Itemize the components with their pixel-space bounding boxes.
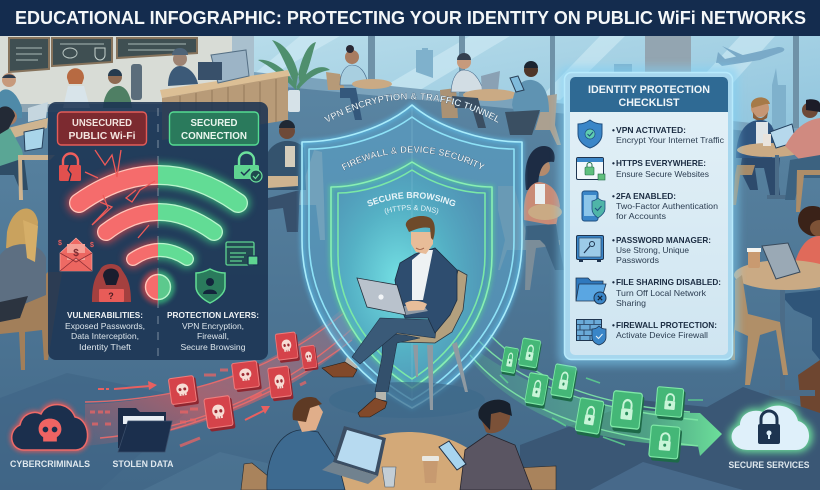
label: stolen data: STOLEN DATA (112, 459, 174, 469)
item: HTTPS everywhere: • (612, 159, 615, 168)
item: firewall protection: FIREWALL PROTECTION: (616, 321, 717, 330)
panel: Wi-Fi comparison (48, 102, 268, 360)
text: protection layers: PROTECTION LAYERS: (167, 310, 259, 320)
person: barista woman (63, 68, 90, 108)
shield label: firewall and device security: FIREWALL & DEVICE SECURITY (341, 146, 486, 170)
icon: broken lock (59, 154, 81, 182)
text: protection layers: VPN Encryption, (182, 321, 244, 331)
badge: secured connection (170, 112, 258, 145)
laptop (357, 278, 428, 315)
padlock icon (758, 411, 780, 444)
item: VPN activated: • (612, 126, 615, 135)
person: woman in pink top right (785, 99, 820, 212)
network protected stream: green (470, 335, 722, 456)
icon: secure browser (226, 242, 258, 265)
padlock tiles (500, 338, 686, 463)
item: password manager (576, 236, 711, 265)
icon: green lock with check (234, 152, 262, 182)
person: barista at desk (168, 48, 198, 86)
central table with two people (241, 397, 556, 490)
city silhouette (416, 48, 786, 132)
person: man with tablet at window (505, 61, 561, 145)
item: 2FA enabled: • (612, 192, 615, 201)
item: file sharing disabled (576, 278, 721, 308)
item: file sharing disabled: Sharing (616, 298, 646, 308)
left person (241, 397, 345, 490)
icon: phishing envelope (58, 238, 94, 271)
icon: phishing envelope: $ (90, 242, 94, 249)
badge: unsecured public Wi-Fi: PUBLIC Wi-Fi (68, 131, 136, 142)
item: file sharing disabled: FILE SHARING DISABLED: (616, 278, 721, 287)
right person (460, 400, 556, 490)
shield label: VPN encryption and traffic tunnel: VPN ENCRYPTION & TRAFFIC TUNNEL (324, 92, 499, 123)
item: VPN activated: VPN ACTIVATED: (616, 126, 686, 135)
person: woman with laptop right (780, 206, 820, 420)
Wi-Fi symbol: unsecured half (62, 157, 158, 307)
item: file sharing disabled: Turn Off Local Network (616, 288, 707, 298)
item: 2FA enabled: for Accounts (616, 211, 666, 221)
item: firewall protection: Activate Device Firewall (616, 330, 708, 340)
label: cybercriminals: CYBERCRIMINALS (10, 459, 90, 469)
icon: phishing envelope: $ (73, 248, 79, 259)
person: woman in teal (0, 106, 55, 200)
checklist header: IDENTITY PROTECTION (588, 84, 710, 96)
item: 2FA enabled: 2FA ENABLED: (616, 192, 676, 201)
person: man in blue jacket (733, 97, 803, 205)
badge: unsecured public Wi-Fi: UNSECURED (72, 118, 132, 129)
item: password manager: Passwords (616, 255, 659, 265)
item: firewall protection (576, 320, 717, 345)
coffee cup (422, 456, 439, 483)
icon: hooded hacker: ? (108, 291, 114, 301)
label: secure services: SECURE SERVICES (728, 460, 810, 470)
left laptop (322, 426, 386, 484)
text: vulnerabilities (65, 310, 145, 352)
icon: user shield (196, 269, 225, 303)
icon: hooded hacker (92, 264, 131, 302)
left seating (0, 118, 48, 142)
central man seated with laptop (322, 216, 485, 418)
item: file sharing disabled: • (612, 278, 615, 287)
item: HTTPS everywhere (576, 158, 709, 180)
text: vulnerabilities: VULNERABILITIES: (67, 310, 143, 320)
person: man with laptop at window (440, 53, 517, 128)
head (406, 216, 435, 254)
cybercriminals cloud (10, 402, 90, 452)
coffee machine, monitor and grinder (211, 50, 249, 83)
icon: phishing envelope: $ (58, 240, 62, 247)
cafe table with laptop and cup, right (734, 243, 820, 396)
checklist header (570, 77, 728, 112)
floor zone shading (0, 373, 200, 490)
item: HTTPS everywhere: HTTPS EVERYWHERE: (616, 159, 706, 168)
text: vulnerabilities: Exposed Passwords, (65, 321, 145, 331)
item: firewall protection: • (612, 321, 615, 330)
paper cup (382, 467, 396, 487)
title bar: EDUCATIONAL INFOGRAPHIC: PROTECTING YOUR IDENTITY ON PUBLIC WiFi NETWORKS (15, 8, 806, 28)
person: man left of shield (268, 120, 325, 240)
stolen data folder (118, 408, 172, 452)
chair (385, 270, 468, 410)
item: 2FA enabled: Two-Factor Authentication (616, 201, 718, 211)
secure services cloud (729, 403, 812, 452)
person: customer at counter (103, 69, 132, 108)
text: vulnerabilities: Identity Theft (79, 342, 132, 352)
lightning cracks (85, 150, 155, 238)
item: VPN activated: Encrypt Your Internet Traffic (616, 135, 724, 145)
network attack stream: red (85, 306, 362, 446)
chalkboards (9, 38, 197, 72)
badge: unsecured public Wi-Fi (58, 112, 146, 145)
badge: secured connection: CONNECTION (181, 131, 247, 142)
legs and shoes (322, 318, 437, 417)
layered security shield (298, 92, 527, 410)
chair, right (731, 275, 788, 385)
Wi-Fi symbol: secured half (158, 158, 255, 306)
item: password manager: • (612, 236, 615, 245)
person: blonde woman (0, 209, 62, 370)
window mullions (368, 36, 799, 128)
item: password manager: PASSWORD MANAGER: (616, 236, 711, 245)
shield ring: firewall and browsing (331, 162, 492, 388)
airplane (716, 46, 784, 66)
item: VPN activated (578, 120, 724, 148)
item: password manager: Use Strong, Unique (616, 245, 689, 255)
floor shadow (329, 382, 485, 418)
badge: secured connection: SECURED (190, 118, 238, 129)
text: protection layers: Secure Browsing (180, 342, 246, 352)
skull icon (39, 419, 61, 441)
title bar (0, 0, 820, 36)
tablet (439, 441, 466, 470)
shield label: secure browsing: SECURE BROWSING (367, 192, 456, 206)
shield label: HTTPS and DNS: (HTTPS & DNS) (384, 204, 438, 215)
person: woman right of shield (498, 146, 564, 290)
item: HTTPS everywhere: Ensure Secure Websites (616, 169, 709, 179)
shield ring: VPN tunnel (302, 105, 522, 408)
skull tiles (168, 332, 319, 432)
counter (160, 70, 290, 98)
text: protection layers (167, 310, 259, 352)
torso (395, 248, 457, 333)
text: protection layers: Firewall, (197, 331, 229, 341)
plant (258, 40, 330, 92)
item: 2FA enabled (582, 191, 718, 221)
person: woman at top window (326, 45, 392, 120)
panel: identity protection checklist (558, 66, 739, 366)
checklist header: CHECKLIST (618, 97, 680, 109)
text: vulnerabilities: Data Interception, (71, 331, 139, 341)
person: customer far left (0, 73, 22, 118)
